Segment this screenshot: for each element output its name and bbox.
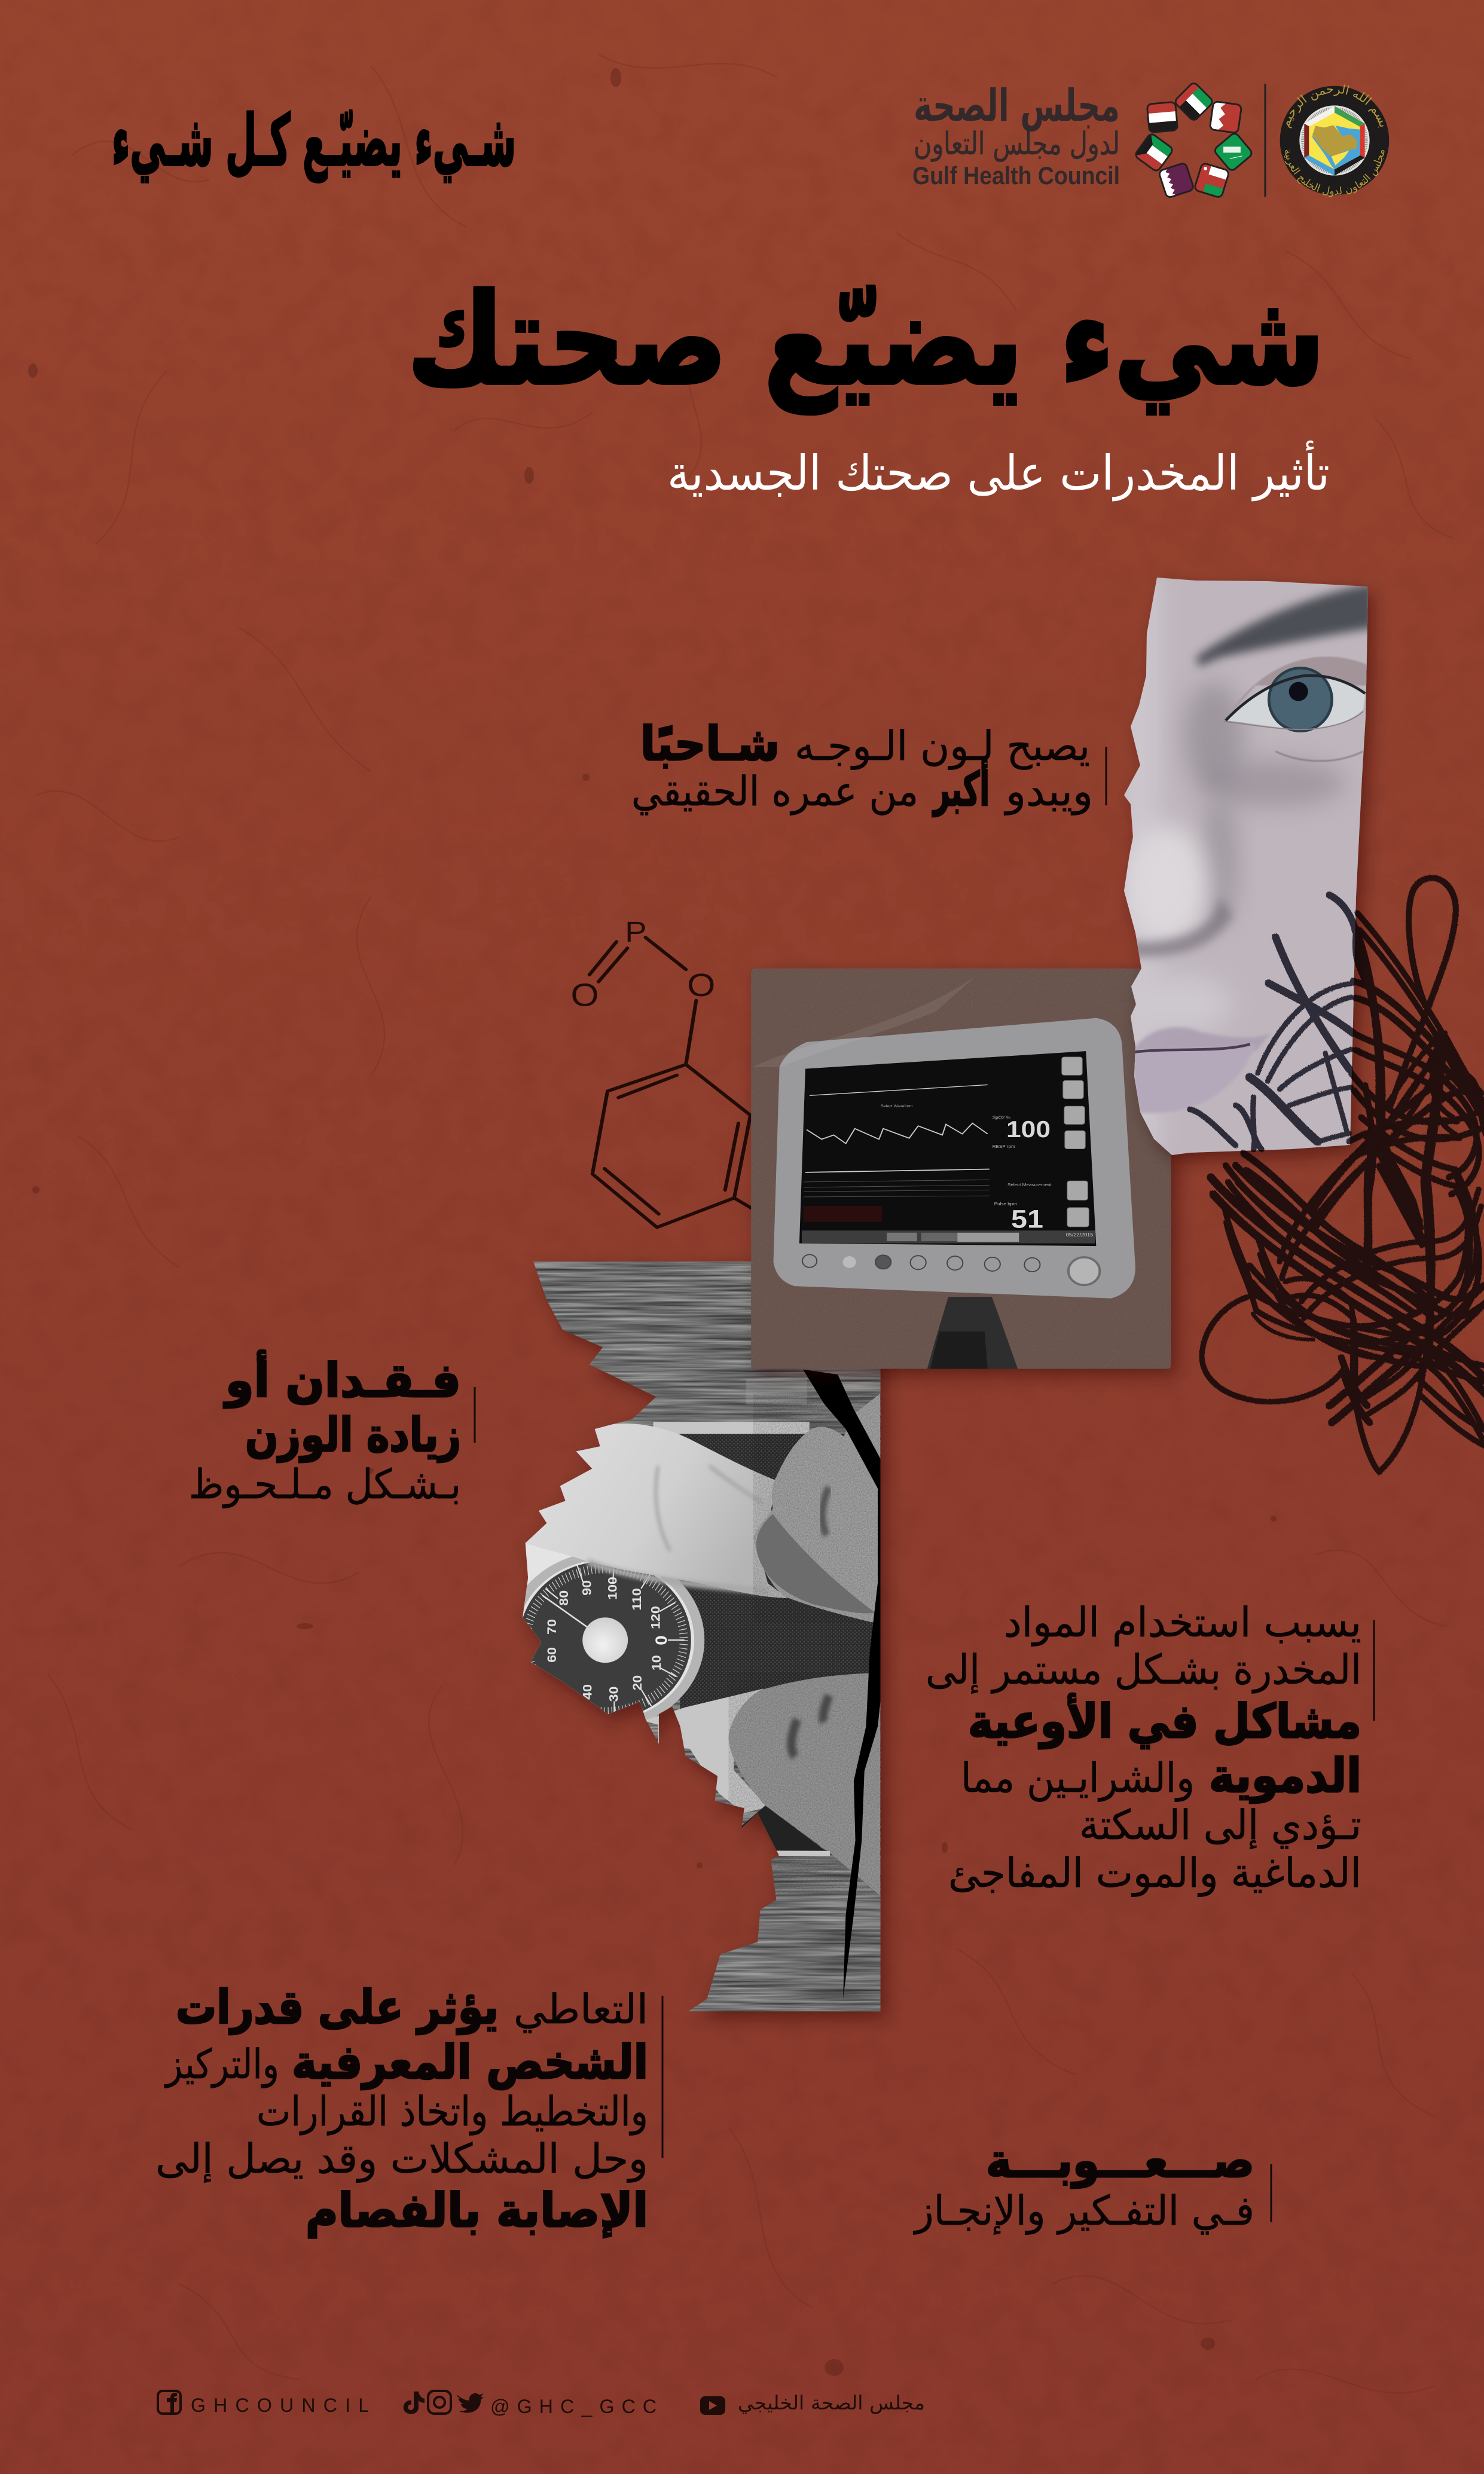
label pulse: Pulse bpm <box>994 1202 1017 1207</box>
divider <box>1373 1620 1375 1721</box>
text block: blood vessels <box>926 1599 1374 1897</box>
scribble loops <box>1190 878 1456 1472</box>
dial number 20: 20 <box>630 1675 645 1691</box>
reading label: Select Measurement <box>1007 1183 1052 1187</box>
line 1 regular: يصبح لـون الـوجـه <box>795 723 1090 770</box>
heading: صـــعـــوبـــة <box>986 2134 1254 2188</box>
subtitle: تأثير المخدرات على صحتك الجسدية <box>667 441 1330 502</box>
logo: flag star <box>1134 81 1253 198</box>
monitor body <box>774 1018 1135 1299</box>
dial number 80: 80 <box>557 1590 571 1606</box>
lower sock <box>729 1673 880 1895</box>
logo subtitle arabic: لدول مجلس التعاون <box>914 126 1120 162</box>
label date: 05/22/2015 <box>1066 1232 1094 1238</box>
flag: Oman <box>1194 163 1229 198</box>
side buttons <box>1062 1057 1089 1227</box>
line 2 bold: الشخص المعرفية <box>292 2036 648 2090</box>
face shading <box>1118 574 1345 1160</box>
line 2 end: من عمره الحقيقي <box>631 768 918 815</box>
label select waveform: Select Waveform <box>881 1104 913 1108</box>
scribble density pass <box>1213 930 1484 1447</box>
dial number 0: 0 <box>652 1635 670 1645</box>
divider <box>1105 747 1107 805</box>
reading 51: 51 <box>1011 1205 1043 1233</box>
divider <box>1270 2164 1272 2222</box>
light wood patch <box>746 1379 807 1404</box>
handle: arabic channel name: مجلس الصحة الخليجي <box>738 2391 925 2414</box>
scale frame <box>654 1422 810 1434</box>
flag: Yemen <box>1147 102 1178 133</box>
text block: difficulty <box>913 2134 1271 2235</box>
logo name arabic: مجلس الصحة <box>914 80 1120 132</box>
dial number 60: 60 <box>545 1647 559 1663</box>
icon: twitter <box>457 2393 484 2413</box>
atom O left: O <box>570 977 599 1013</box>
photo: pale face <box>1118 574 1375 1160</box>
label resp: RESP rpm <box>993 1144 1015 1149</box>
photo: bathroom scale <box>506 1256 897 2021</box>
scribble <box>1190 878 1484 1472</box>
upper foot <box>524 1424 787 1598</box>
icon: facebook <box>158 2391 181 2414</box>
line 3: والتخطيط واتخاذ القرارات <box>257 2088 648 2136</box>
lower mat <box>737 1806 825 1850</box>
divider <box>474 1387 476 1443</box>
upper sock <box>753 1394 880 1623</box>
lower foot <box>642 1689 768 1813</box>
line 1 bold: يؤثر على قدرات <box>176 1981 499 2035</box>
heading line 1: فـقـدان أو <box>223 1350 461 1408</box>
text block: weight change <box>189 1350 475 1508</box>
footer: social handles <box>158 2391 925 2417</box>
handle: ghcouncil: GHCOUNCIL <box>191 2394 369 2416</box>
eyebrow <box>1196 583 1375 667</box>
dial number 120: 120 <box>648 1606 662 1629</box>
icon: instagram <box>428 2391 451 2414</box>
lips <box>1132 1027 1271 1113</box>
atom P: P <box>625 915 647 948</box>
dial number 110: 110 <box>630 1588 644 1611</box>
line 2 bold: أكبر <box>932 759 990 817</box>
logo divider <box>1264 84 1266 197</box>
eye <box>1224 656 1369 761</box>
dial number 70: 70 <box>545 1619 559 1635</box>
body line: بـشـكل مـلـحـوظ <box>189 1461 461 1508</box>
scale frame bottom <box>770 1851 830 1856</box>
text block: cognition <box>155 1981 662 2238</box>
reading 100: 100 <box>1006 1116 1051 1142</box>
dial number 30: 30 <box>606 1687 621 1702</box>
line 4 bold: الدموية <box>1209 1749 1361 1803</box>
line 1: يسبب استخدام المواد <box>1004 1599 1361 1647</box>
line 4: وحل المشكلات وقد يصل إلى <box>155 2136 648 2183</box>
logo name english: Gulf Health Council <box>912 161 1120 190</box>
flag: Qatar <box>1158 163 1194 198</box>
dial number 10: 10 <box>649 1655 664 1670</box>
line 5: تـؤدي إلى السكتة <box>1079 1802 1361 1849</box>
handle: ghc_gcc: @GHC_GCC <box>490 2396 656 2417</box>
line 1 bold: شـاحبًا <box>640 717 780 771</box>
label spo2: SpO2 % <box>993 1115 1010 1120</box>
monitor knob <box>1068 1257 1100 1285</box>
paper tear <box>803 1370 891 1999</box>
dial number 90: 90 <box>579 1580 594 1596</box>
line 6: الدماغية والموت المفاجئ <box>948 1850 1361 1897</box>
bottom buttons <box>802 1254 1040 1272</box>
dial number 100: 100 <box>605 1577 619 1600</box>
icon: tiktok <box>404 2391 425 2414</box>
flag: UAE <box>1174 81 1214 122</box>
scale mat <box>680 1434 880 1709</box>
icon: youtube <box>700 2396 725 2415</box>
flag: Kuwait <box>1134 133 1174 172</box>
logotype: campaign wordmark: شـيء يضيّـع كـل شـيء <box>112 99 516 182</box>
wood floor <box>514 1256 897 2021</box>
dial <box>506 1551 704 1728</box>
logo: Gulf Health Council wordmark <box>912 80 1120 190</box>
heading line 2: زيادة الوزن <box>245 1409 461 1462</box>
text block: pale face <box>631 717 1106 817</box>
monitor screen <box>799 1051 1096 1246</box>
divider <box>661 1996 664 2158</box>
seal inscription top: بسم الله الرحمن الرحيم <box>1286 84 1384 129</box>
body: فـي التفـكير والإنجـاز <box>913 2188 1254 2235</box>
line 5 bold: الإصابة بالفصام <box>306 2184 648 2238</box>
line 3 bold: مشاكل في الأوعية <box>968 1694 1361 1749</box>
title: شيء يضيّع صحتك <box>407 267 1325 414</box>
seal inscription bottom: مجلس التعاون لدول الخليج العربية <box>1284 149 1385 197</box>
scribble tangle <box>1211 913 1484 1430</box>
platform white <box>521 1541 578 1618</box>
line 2 regular: والتركيز <box>164 2041 279 2088</box>
flag: Bahrain <box>1210 101 1242 133</box>
logo: GCC seal <box>1280 84 1390 197</box>
atom O right: O <box>687 967 715 1003</box>
monitor stand <box>927 1297 1018 1369</box>
photo: monitor card <box>751 969 1171 1369</box>
line 4 regular: والشرايـين مما <box>961 1755 1195 1802</box>
dial number 40: 40 <box>581 1684 595 1700</box>
line 1 regular: التعاطي <box>514 1986 648 2033</box>
icon: molecule structure <box>570 915 780 1227</box>
line 2 start: ويبدو <box>1004 768 1093 815</box>
line 2: المخدرة بشـكل مستمر إلى <box>926 1647 1361 1694</box>
flag: Saudi Arabia <box>1214 133 1252 171</box>
